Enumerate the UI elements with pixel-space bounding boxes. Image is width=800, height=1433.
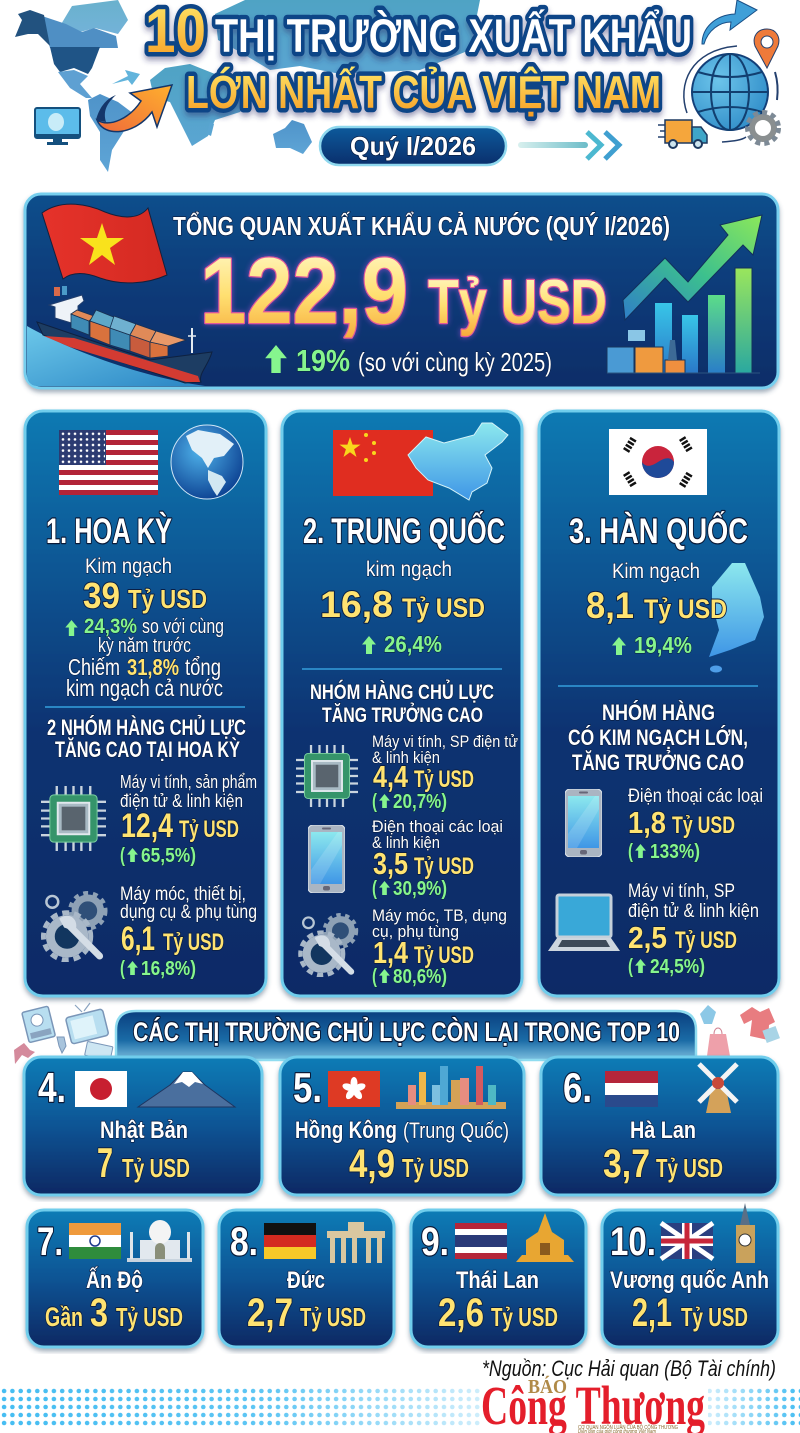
item: laptops Korea: 24,5%)	[650, 956, 705, 978]
item: computers China: Tỷ USD	[414, 766, 474, 793]
value block: US	[65, 555, 224, 701]
item: machinery US: 16,8%)	[141, 958, 196, 980]
icon: Brandenburg Gate	[327, 1222, 385, 1263]
item: computers China	[296, 732, 518, 813]
overview growth: 19%	[296, 343, 350, 378]
icon: globe	[171, 425, 243, 499]
item: phones Korea	[565, 786, 763, 863]
value block: US: 31,8%	[127, 654, 179, 680]
item: phones Korea: 133%)	[650, 841, 700, 863]
card: 9 Thailand: Thái Lan	[456, 1267, 539, 1294]
card: 10 United Kingdom: 2,1	[632, 1291, 672, 1335]
icon: Japan flag	[75, 1071, 127, 1107]
subheading: Korea key goods: CÓ KIM NGẠCH LỚN,	[568, 725, 748, 750]
card: 9 Thailand	[411, 1210, 586, 1347]
icon: Netherlands flag	[605, 1071, 658, 1107]
card: 6 Netherlands: Tỷ USD	[656, 1153, 723, 1183]
value block: US: 39	[83, 575, 120, 616]
value block: US: Tỷ USD	[128, 584, 207, 614]
card: 5 Hong Kong	[280, 1057, 524, 1195]
icon: US flag	[59, 430, 158, 495]
value block: US: 24,3%	[84, 615, 137, 638]
item: computers China: 20,7%)	[393, 791, 447, 813]
item: laptops Korea: 2,5	[628, 920, 667, 955]
banner heading: remaining markets	[116, 1011, 696, 1060]
value block: China: Tỷ USD	[402, 593, 485, 623]
logo: Báo Công Thương: BÁO	[528, 1375, 567, 1398]
item: machinery China: (	[372, 966, 377, 988]
subheading: Korea key goods: TĂNG TRƯỞNG CAO	[572, 750, 744, 775]
panel: 2 China	[282, 411, 522, 996]
card: 8 Germany: 8.	[230, 1220, 258, 1264]
card: 8 Germany: 2,7	[247, 1291, 293, 1335]
item: computers China: (	[372, 791, 377, 813]
overview growth: (so với cùng kỳ 2025)	[358, 347, 552, 377]
icons: shopping right of banner	[700, 1005, 780, 1056]
heading: Hoa Kỳ: 1. HOA KỲ	[46, 511, 172, 551]
icon: Thai temple	[516, 1213, 574, 1262]
card: 8 Germany: Tỷ USD	[300, 1302, 366, 1332]
subheading: US key goods: TĂNG CAO TẠI HOA KỲ	[55, 737, 240, 762]
card: 6 Netherlands: Hà Lan	[630, 1117, 696, 1144]
card: 4 Japan: Tỷ USD	[122, 1153, 190, 1183]
value block: Korea: Kim ngạch	[612, 560, 700, 583]
icon: Germany flag	[264, 1223, 316, 1259]
item: laptops Korea: Tỷ USD	[675, 927, 737, 954]
card: 9 Thailand: Tỷ USD	[491, 1302, 558, 1332]
panel: 3 South Korea	[539, 411, 779, 996]
overview total value	[200, 238, 607, 343]
subheading: China key goods	[310, 680, 494, 727]
item: laptops Korea: điện tử & linh kiện	[628, 901, 759, 922]
card: 10 United Kingdom: Tỷ USD	[681, 1302, 748, 1332]
card: 5 Hong Kong: (Trung Quốc)	[403, 1118, 509, 1143]
item: computers US: Máy vi tính, sản phẩm	[120, 772, 257, 792]
subheading: China key goods: NHÓM HÀNG CHỦ LỰC	[310, 680, 494, 704]
item: machinery China: 1,4	[373, 935, 409, 970]
item: machinery US: (	[120, 958, 125, 980]
item: machinery US: 6,1	[121, 920, 155, 958]
overview total value: 122,9	[200, 238, 408, 343]
card: 6 Netherlands	[541, 1057, 778, 1195]
card: 5 Hong Kong: 5.	[293, 1064, 322, 1111]
value block: China: 16,8	[320, 584, 393, 625]
panel: national export overview	[25, 194, 778, 388]
panel: 1 United States	[25, 411, 266, 996]
card: 10 United Kingdom	[602, 1203, 778, 1347]
card: 8 Germany: Đức	[287, 1267, 325, 1294]
value block: Korea: 8,1	[586, 585, 634, 626]
item: phones Korea: Điện thoại các loại	[628, 786, 763, 807]
item: machinery US: Máy móc, thiết bị,	[120, 884, 246, 905]
icon: Vietnam flag	[42, 204, 167, 283]
item: machinery China: Máy móc, TB, dụng	[372, 906, 507, 925]
icon: orange rising arrow	[96, 85, 172, 132]
icon: windmill	[699, 1064, 737, 1113]
icon: China map	[408, 423, 508, 500]
value block: China: 26,4%	[384, 631, 442, 657]
card: 7 India: 3	[90, 1291, 108, 1335]
item: phones China: & linh kiện	[372, 833, 440, 852]
icons: electronics left of banner	[14, 1003, 113, 1064]
card: 10 United Kingdom: 10.	[610, 1220, 656, 1264]
item: computers China: 4,4	[373, 759, 409, 794]
item: machinery China: Tỷ USD	[414, 942, 474, 969]
arrow: chevrons	[518, 132, 619, 159]
item: computers China: & linh kiện	[372, 748, 440, 767]
card: 9 Thailand: 2,6	[438, 1291, 484, 1335]
item: machinery China: cụ, phụ tùng	[372, 922, 459, 941]
item: machinery China	[300, 906, 507, 988]
card: 5 Hong Kong: Tỷ USD	[402, 1153, 469, 1183]
item: computers China: Máy vi tính, SP điện tử	[372, 732, 518, 751]
card: 4 Japan: 4.	[38, 1064, 66, 1111]
icon: computer	[35, 108, 80, 145]
value block: US: Chiếm	[68, 654, 120, 680]
value block: US: tổng	[185, 654, 221, 680]
subheading: US key goods: 2 NHÓM HÀNG CHỦ LỰC	[47, 715, 246, 740]
item: phones China: 3,5	[373, 846, 408, 881]
item: computers US: 12,4	[121, 807, 173, 845]
item: computers US: 65,5%)	[141, 845, 196, 867]
item: phones China: Tỷ USD	[414, 853, 474, 880]
logo: Báo Công Thương: CƠ QUAN NGÔN LUẬN CỦA BỘ CÔNG THƯƠNG	[578, 1424, 678, 1431]
card: 7 India: Gần	[45, 1302, 83, 1332]
heading: Hàn Quốc: 3. HÀN QUỐC	[569, 511, 748, 551]
title: THỊ TRƯỜNG XUẤT KHẨU	[215, 9, 692, 62]
value block: US: Kim ngạch	[85, 555, 172, 578]
item: machinery US: Tỷ USD	[163, 929, 224, 956]
icon: Hong Kong flag	[328, 1071, 380, 1107]
item: phones China	[308, 817, 503, 900]
icon: UK flag	[661, 1223, 713, 1259]
card: 9 Thailand: 9.	[421, 1220, 449, 1264]
card: 6 Netherlands: 6.	[563, 1064, 592, 1111]
item: machinery US	[43, 884, 257, 980]
item: laptops Korea: Máy vi tính, SP	[628, 881, 735, 902]
item: machinery China: 80,6%)	[393, 966, 447, 988]
icon: Taj Mahal	[127, 1220, 192, 1262]
card: 4 Japan	[24, 1057, 262, 1195]
value block: China	[320, 558, 485, 657]
item: computers US: điện tử & linh kiện	[120, 791, 243, 811]
value block: US: so với cùng	[142, 616, 224, 638]
icon: India flag	[69, 1223, 121, 1259]
item: computers US: (	[120, 845, 125, 867]
overview growth	[265, 343, 552, 378]
item: machinery US: dụng cụ & phụ tùng	[120, 902, 257, 923]
icon: skyline	[396, 1066, 506, 1109]
subheading: China key goods: TĂNG TRƯỞNG CAO	[322, 703, 483, 727]
icon: global logistics	[658, 0, 779, 148]
title: LỚN NHẤT CỦA VIỆT NAM	[186, 66, 661, 118]
value block: US: kỳ năm trước	[98, 635, 191, 657]
period pill: Quý I/2026	[350, 131, 476, 161]
card: 5 Hong Kong: Hồng Kông	[295, 1117, 397, 1144]
card: 6 Netherlands: 3,7	[603, 1142, 650, 1186]
value block: China: kim ngạch	[366, 558, 452, 581]
icon: Big Ben	[736, 1203, 755, 1263]
subheading: US key goods	[47, 715, 246, 762]
icon: China flag	[333, 430, 433, 496]
icon: Korea map	[709, 563, 764, 672]
card: 7 India: 7.	[37, 1220, 63, 1264]
value block: Korea: Tỷ USD	[644, 594, 727, 624]
item: laptops Korea: (	[628, 956, 633, 978]
card: 4 Japan: Nhật Bản	[100, 1117, 188, 1144]
item: phones China: Điện thoại các loại	[372, 817, 503, 836]
card: 4 Japan: 7	[97, 1139, 113, 1186]
item: computers US	[41, 772, 257, 867]
icon: Thailand flag	[455, 1223, 507, 1259]
icon: Mount Fuji	[138, 1072, 235, 1107]
overview total value: Tỷ USD	[428, 268, 607, 337]
item: computers US: Tỷ USD	[179, 816, 239, 843]
card: 7 India: Tỷ USD	[116, 1302, 183, 1332]
value block: US: kim ngạch cả nước	[66, 675, 223, 701]
item: phones Korea: (	[628, 841, 633, 863]
card: 7 India	[27, 1210, 203, 1347]
subheading: Korea key goods	[568, 700, 748, 775]
overview heading: TỔNG QUAN XUẤT KHẨU CẢ NƯỚC (QUÝ I/2026)	[173, 211, 670, 241]
icon: growth chart	[607, 215, 762, 373]
item: phones China: 30,9%)	[393, 878, 447, 900]
value block: Korea: 19,4%	[634, 632, 692, 658]
subheading: Korea key goods: NHÓM HÀNG	[602, 700, 715, 725]
header: world map background	[15, 0, 480, 172]
icon: Korea flag	[609, 429, 707, 495]
item: laptops Korea	[548, 881, 759, 978]
item: phones Korea: Tỷ USD	[672, 812, 735, 839]
card: 7 India: Ấn Độ	[86, 1266, 143, 1294]
card: 5 Hong Kong: 4,9	[349, 1142, 395, 1186]
card: 8 Germany	[219, 1210, 394, 1347]
period pill	[320, 127, 506, 165]
value block: Korea	[586, 560, 727, 658]
heading: Trung Quốc: 2. TRUNG QUỐC	[303, 511, 505, 551]
item: phones Korea: 1,8	[628, 805, 666, 840]
item: phones China: (	[372, 878, 377, 900]
icon: container ship	[27, 286, 212, 386]
title	[145, 0, 692, 118]
